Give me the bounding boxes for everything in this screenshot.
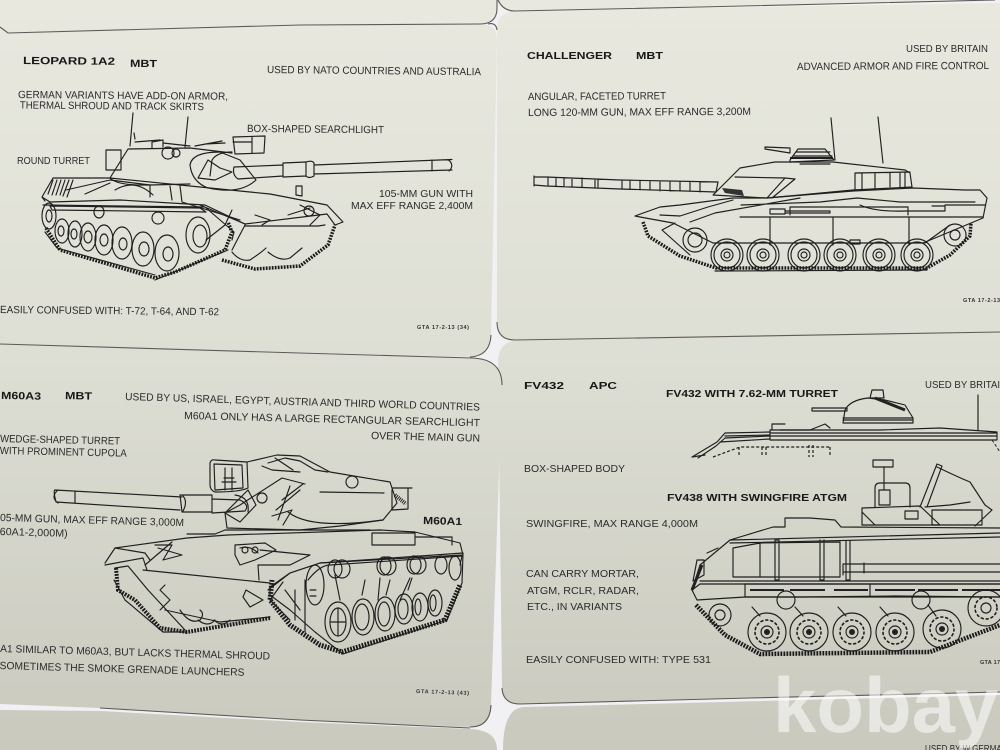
label: M60A1: M60A1: [423, 515, 462, 528]
text: armor note: GERMAN VARIANTS HAVE ADD-ON ARMOR,: [18, 89, 228, 103]
text: searchlight: BOX-SHAPED SEARCHLIGHT: [247, 123, 385, 136]
card heading: FV432: APC: [589, 380, 618, 392]
panel: FV432 card: [498, 332, 1000, 704]
card heading: Challenger: CHALLENGER: [527, 50, 612, 62]
card heading: M60A3: M60A3: [1, 390, 41, 403]
text: gun: [351, 188, 473, 212]
text: variants: ETC., IN VARIANTS: [527, 601, 622, 613]
text: confusion: EASILY CONFUSED WITH: T-72, T-64, AND T-62: [0, 304, 219, 318]
text: similar: [0, 643, 271, 680]
text: armor: ADVANCED ARMOR AND FIRE CONTROL: [797, 60, 989, 73]
card heading: M60A3: MBT: [65, 390, 93, 403]
drawing: M60 tank: [54, 455, 463, 654]
text: similar: SOMETIMES THE SMOKE GRENADE LAUNCHERS: [0, 660, 245, 679]
drawing: Leopard tank: [42, 113, 452, 280]
card heading: FV432: [524, 380, 618, 392]
text: searchlight: OVER THE MAIN GUN: [371, 430, 480, 445]
text: card code: GTA 17: [980, 660, 1000, 666]
panel: cropped card bottom left: [0, 710, 497, 750]
card heading: Leopard 1A2: [23, 55, 158, 70]
text: turret: ROUND TURRET: [17, 155, 91, 167]
panel: cropped card top right: [498, 0, 1000, 11]
panel: M60A3 card: [0, 344, 502, 727]
text: confusion: EASILY CONFUSED WITH: TYPE 531: [526, 654, 711, 666]
text: variants: [526, 568, 639, 613]
watermark: kobay: kobay: [773, 661, 998, 749]
text: gun: LONG 120-MM GUN, MAX EFF RANGE 3,200M: [528, 106, 751, 119]
panel: cropped card bottom right: [503, 695, 1000, 750]
panel: Challenger card: [497, 3, 1000, 340]
card heading: Leopard 1A2: MBT: [130, 58, 158, 70]
text: searchlight: M60A1 ONLY HAS A LARGE RECTANGULAR SEARCHLIGHT: [184, 410, 481, 429]
text: similar: A1 SIMILAR TO M60A3, BUT LACKS THERMAL SHROUD: [0, 643, 271, 663]
card heading: M60A3: [1, 389, 93, 404]
text: variants: CAN CARRY MORTAR,: [526, 568, 639, 580]
text: turret: ANGULAR, FACETED TURRET: [528, 90, 667, 103]
text: card code: GTA 17-2-13: [963, 298, 1000, 304]
text: swingfire: SWINGFIRE, MAX RANGE 4,000M: [526, 518, 698, 530]
drawing: Challenger tank: [534, 117, 987, 271]
drawing: FV438 with Swingfire: [692, 460, 1000, 654]
panel: Leopard 1A2 card: [0, 24, 497, 357]
text: armor note: THERMAL SHROUD AND TRACK SKIRTS: [20, 100, 204, 113]
text: used by: USED BY NATO COUNTRIES AND AUSTRALIA: [267, 64, 481, 78]
text: turret: WITH PROMINENT CUPOLA: [0, 445, 127, 460]
text: used by: USED BY BRITAIN: [906, 43, 988, 55]
text: box shaped: BOX-SHAPED BODY: [524, 463, 625, 475]
text: gun: 60A1-2,000M): [0, 526, 68, 540]
sub-heading: FV432 turret: FV432 WITH 7.62-MM TURRET: [666, 388, 839, 400]
card heading: Challenger: MBT: [636, 50, 664, 62]
card heading: FV432: FV432: [524, 380, 564, 392]
text: gun: [0, 512, 184, 543]
sub-heading: FV438: FV438 WITH SWINGFIRE ATGM: [667, 492, 847, 504]
text: searchlight: [184, 410, 481, 445]
text: gun: 105-MM GUN WITH: [379, 188, 473, 200]
text: card code: GTA 17-2-13 (34): [417, 325, 469, 331]
text: variants: ATGM, RCLR, RADAR,: [527, 585, 639, 597]
text: used by: USED BY US, ISRAEL, EGYPT, AUSTRIA AND THIRD WORLD COUNTRIES: [125, 391, 480, 414]
text: turret: [0, 433, 127, 460]
drawing: FV432 with turret: [692, 390, 1000, 458]
text: turret: WEDGE-SHAPED TURRET: [0, 433, 121, 448]
text: armor note: [18, 89, 228, 113]
text: card code: GTA 17-2-13 (43): [416, 689, 469, 697]
text: gun: MAX EFF RANGE 2,400M: [351, 200, 473, 212]
panel: cropped card top left: [0, 0, 497, 33]
card heading: Challenger: [527, 50, 664, 62]
card heading: Leopard 1A2: LEOPARD 1A2: [23, 55, 115, 68]
text: gun: 05-MM GUN, MAX EFF RANGE 3,000M: [0, 512, 184, 529]
